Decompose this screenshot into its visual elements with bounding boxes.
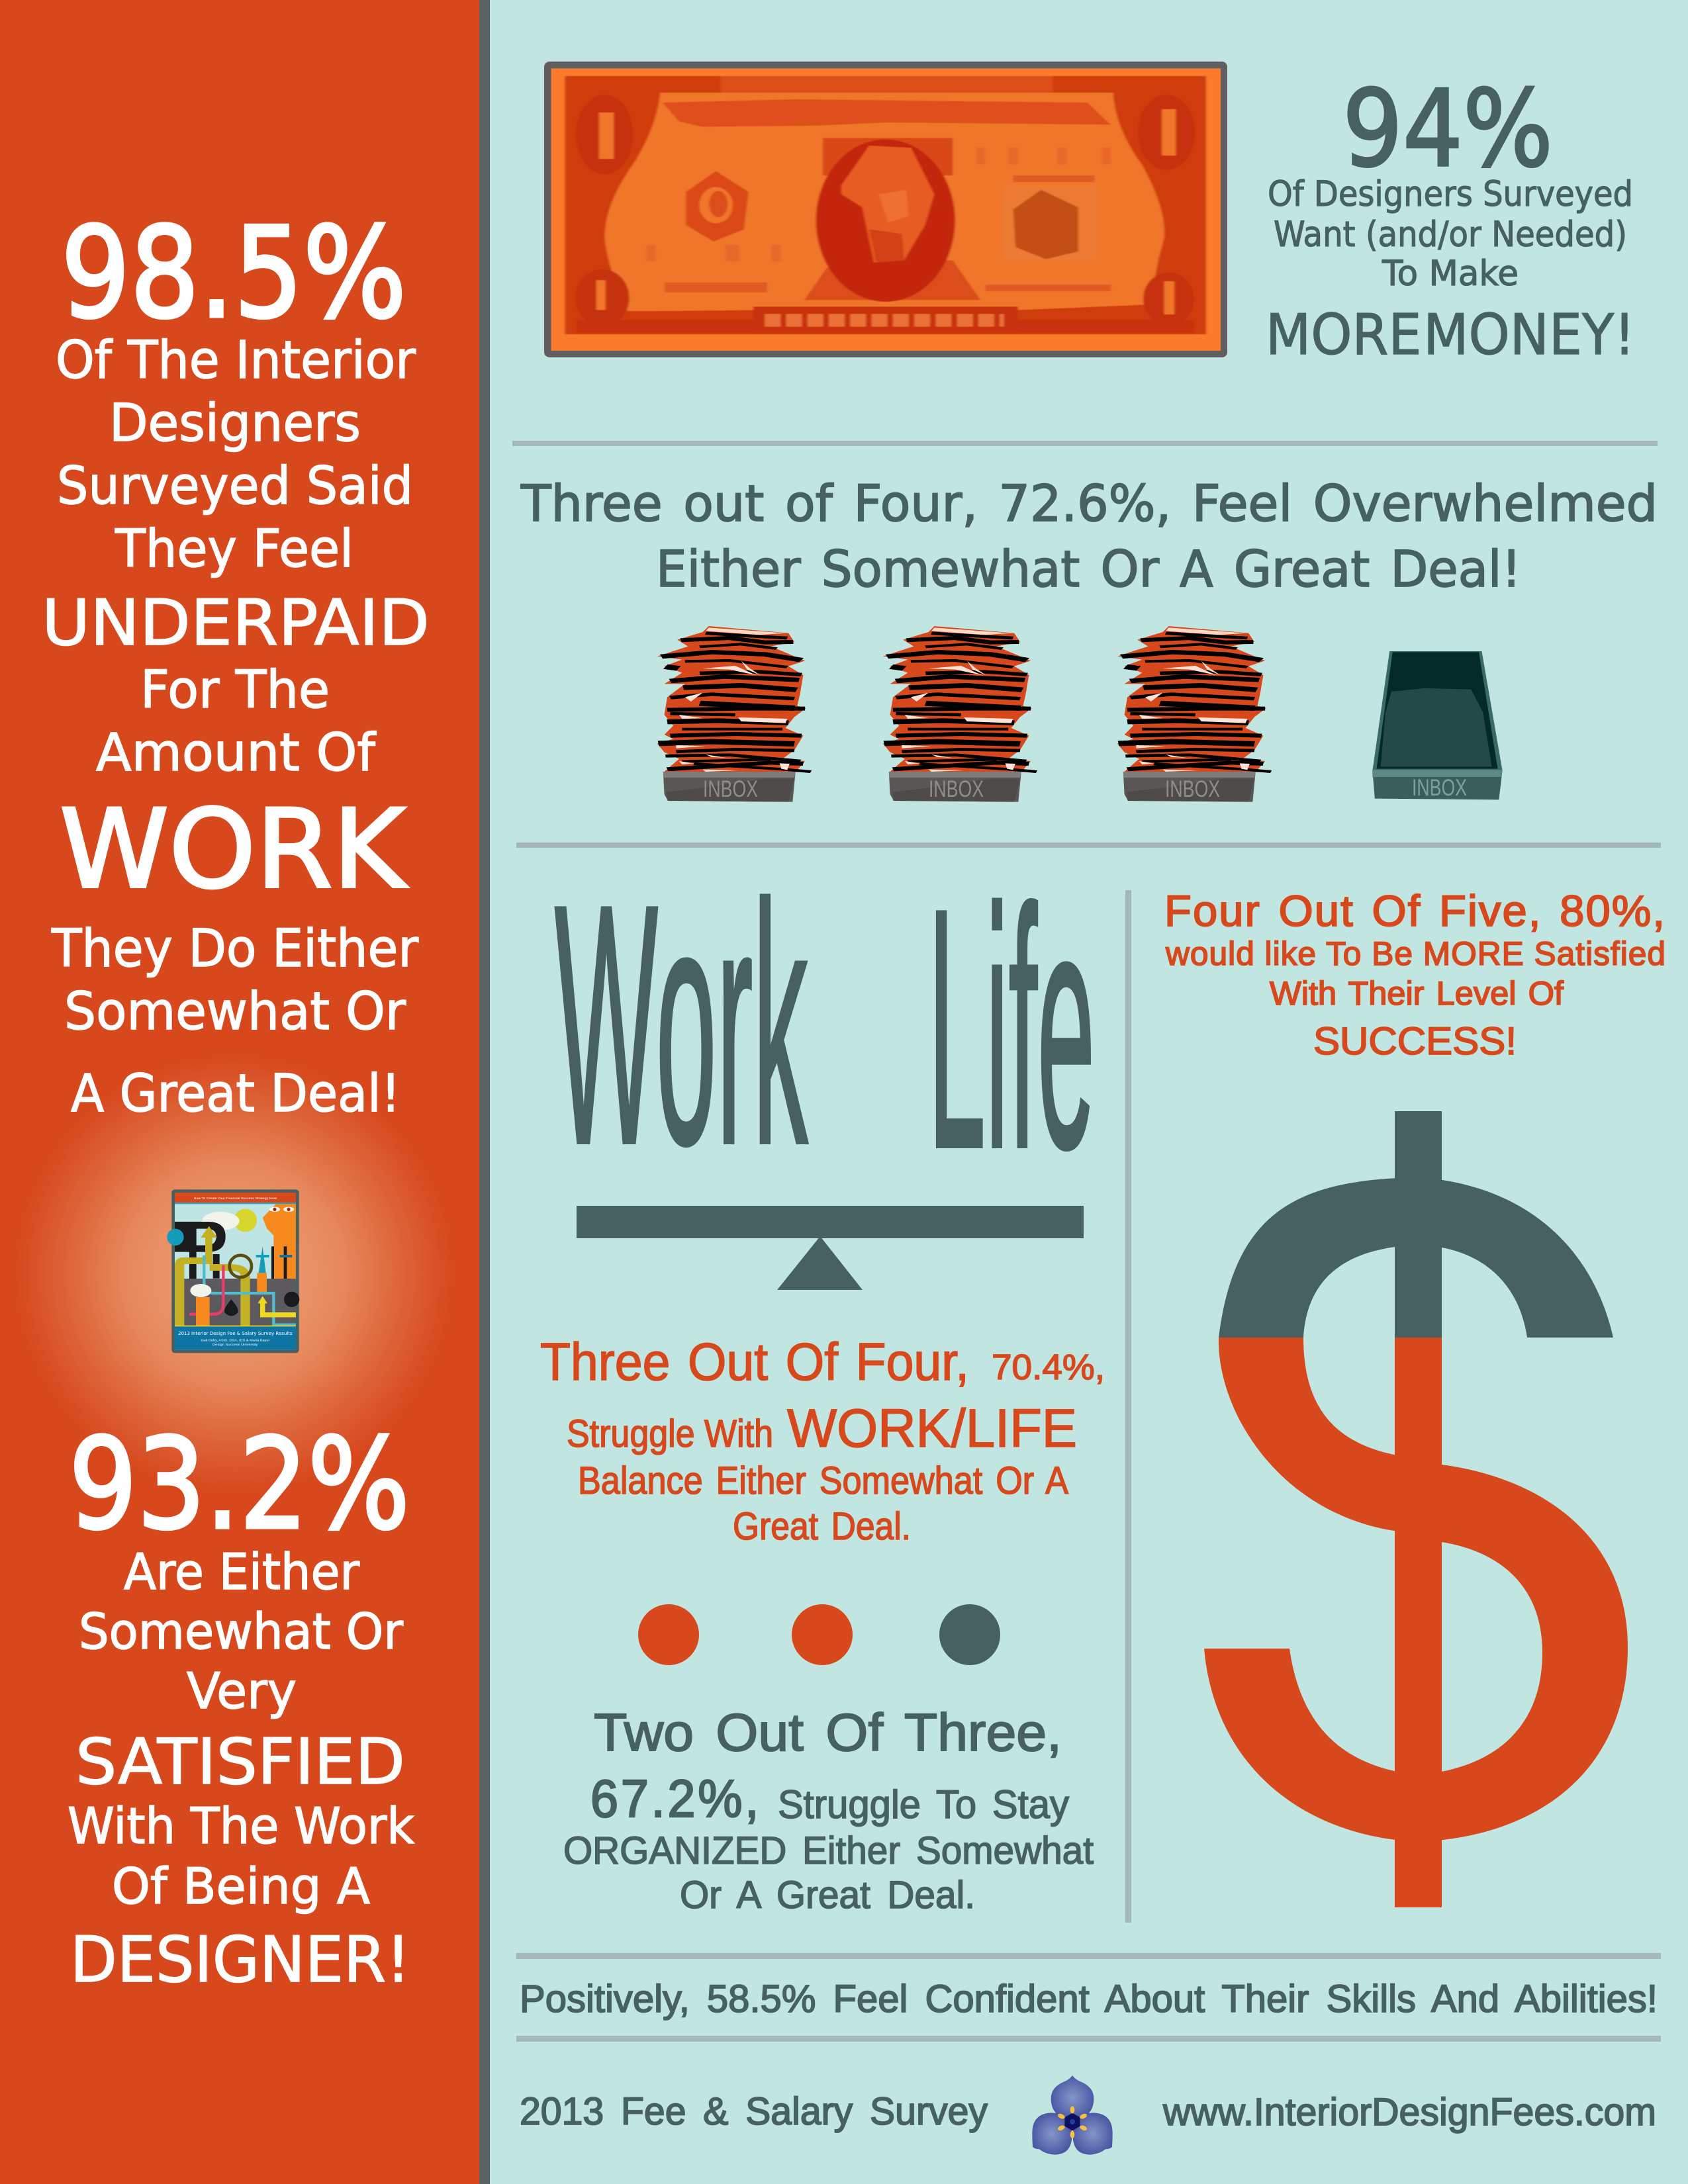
footer: survey title: 2013 Fee & Salary Survey — [520, 2090, 988, 2133]
text block: 94 percent more money: Of Designers Surveyed — [1268, 174, 1633, 214]
stat: 98.5 percent underpaid: A Great Deal! — [71, 1064, 400, 1124]
text block: 94 percent more money: Want (and/or Needed) — [1274, 214, 1627, 255]
book cover: Profit: Design Success University — [212, 1343, 258, 1347]
text: confidence line: Positively, 58.5% Feel Confident About Their Skills And Abilities! — [520, 1978, 1658, 2021]
icon: full inbox 3: INBOX — [1165, 776, 1220, 802]
text block: work/life balance: Balance Either Somewhat Or A — [578, 1459, 1068, 1502]
text block: 94 percent more money: MORE MONEY! — [1266, 302, 1635, 368]
stat: 98.5 percent underpaid: UNDERPAID — [42, 587, 430, 660]
panel: left sidebar — [0, 0, 490, 2184]
text block: 94 percent more money: To Make — [1382, 253, 1519, 294]
footer: website: www.InteriorDesignFees.com — [1162, 2091, 1656, 2134]
icon: empty inbox: INBOX — [1412, 775, 1467, 801]
icon: empty inbox — [1372, 651, 1503, 801]
icon: blue flower logo — [1032, 2075, 1113, 2155]
text block: 94 percent more money: 94% — [1342, 67, 1553, 191]
stat: 93.2 percent satisfied — [68, 1412, 415, 1997]
divider — [516, 842, 1661, 848]
text block: success — [1164, 886, 1666, 1063]
stat: 93.2 percent satisfied: Somewhat Or — [79, 1602, 403, 1661]
book cover: Profit: How To Create Your Financial Success Strategy Now! — [194, 1197, 277, 1201]
text block: 94 percent more money — [1266, 67, 1635, 368]
divider — [516, 1953, 1661, 1959]
text block: stay organized: 67.2%, — [590, 1769, 761, 1828]
stat: 98.5 percent underpaid: Of The Interior — [56, 331, 416, 390]
icon row: three full inboxes and one empty — [657, 626, 1503, 802]
icon: full inbox 2 — [883, 626, 1038, 802]
icon: balance scale — [577, 1206, 1084, 1290]
icon: full inbox 3 — [1117, 626, 1272, 802]
text block: success: With Their Level Of — [1270, 975, 1564, 1012]
divider vertical — [1125, 890, 1131, 1923]
stat: 98.5 percent underpaid: Somewhat Or — [64, 982, 406, 1042]
divider — [512, 441, 1658, 446]
text block: stay organized — [563, 1703, 1094, 1917]
heading: Work Life — [555, 835, 1095, 1218]
stat: 98.5 percent underpaid: 98.5% — [61, 201, 406, 346]
text: Life — [928, 839, 1095, 1218]
book cover: Profit: 2013 Interior Design Fee & Salary Survey Results — [178, 1330, 293, 1336]
text block: stay organized: ORGANIZED Either Somewhat — [563, 1829, 1094, 1872]
text block: work/life balance: WORK/LIFE — [787, 1398, 1077, 1459]
text block: success: SUCCESS! — [1313, 1020, 1517, 1063]
chart: two of three dots — [638, 1604, 1000, 1665]
heading: Work Life: Work — [555, 835, 810, 1214]
stat: 93.2 percent satisfied: DESIGNER! — [70, 1924, 410, 1997]
stat: 98.5 percent underpaid: Surveyed Said — [57, 457, 413, 516]
stat: 98.5 percent underpaid: For The — [140, 660, 330, 720]
stat: 98.5 percent underpaid: They Do Either — [51, 919, 419, 979]
book cover: Profit: Gail Doby, ASID, DSA, IDS & Maria Bayer — [201, 1338, 270, 1342]
icon: full inbox 1 — [657, 626, 812, 802]
stat: 93.2 percent satisfied: SATISFIED — [75, 1726, 405, 1799]
text block: stay organized: Or A Great Deal. — [680, 1874, 975, 1917]
stat: 93.2 percent satisfied: Of Being A — [112, 1857, 370, 1915]
heading: overwhelmed — [520, 474, 1658, 598]
icon: full inbox 2: INBOX — [929, 776, 984, 802]
text block: work/life balance: Struggle With — [567, 1412, 773, 1455]
illustration: dollar bill — [544, 62, 1227, 357]
stat: 98.5 percent underpaid: Amount Of — [96, 723, 377, 783]
icon: dollar sign — [1204, 1111, 1628, 1907]
text block: stay organized: Struggle To Stay — [778, 1782, 1069, 1827]
stat: 98.5 percent underpaid: They Feel — [115, 520, 353, 579]
stat: 93.2 percent satisfied: Are Either — [124, 1543, 359, 1601]
heading: overwhelmed: Either Somewhat Or A Great Deal! — [656, 539, 1521, 598]
text block: work/life balance: Great Deal. — [733, 1505, 911, 1548]
divider — [516, 2036, 1661, 2042]
stat: 93.2 percent satisfied: 93.2% — [69, 1412, 410, 1557]
text block: work/life balance: Three Out Of Four, — [540, 1332, 969, 1391]
text block: work/life balance — [540, 1332, 1105, 1548]
stat: 98.5 percent underpaid: Designers — [109, 394, 361, 453]
heading: overwhelmed: Three out of Four, 72.6%, Feel Overwhelmed — [520, 474, 1658, 533]
stat: 93.2 percent satisfied: With The Work — [68, 1797, 415, 1855]
book cover: Profit — [167, 1189, 299, 1353]
text block: success: would like To Be MORE Satisfied — [1165, 935, 1666, 972]
text block: success: Four Out Of Five, 80%, — [1164, 886, 1666, 935]
stat: 93.2 percent satisfied: Very — [187, 1662, 297, 1720]
text block: work/life balance: 70.4%, — [992, 1347, 1105, 1387]
icon: full inbox 1: INBOX — [703, 776, 758, 802]
stat: 98.5 percent underpaid: WORK — [60, 786, 408, 913]
text block: stay organized: Two Out Of Three, — [594, 1703, 1062, 1762]
stat: 98.5 percent underpaid — [42, 201, 430, 1124]
